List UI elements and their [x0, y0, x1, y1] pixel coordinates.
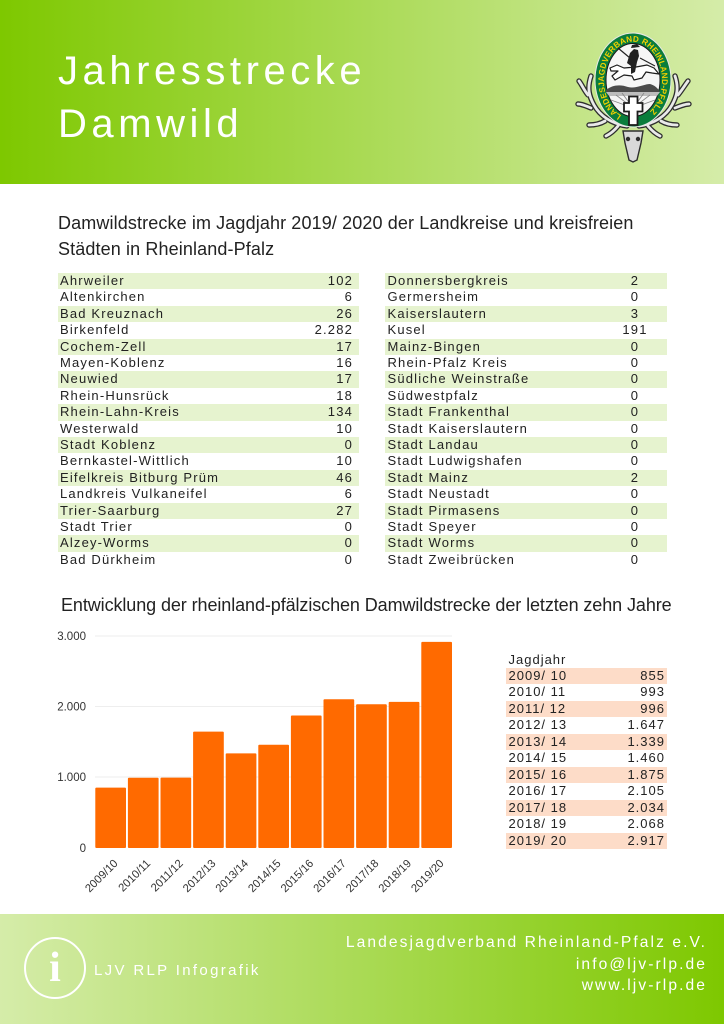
- x axis labels: 2017/18: [344, 858, 381, 895]
- table: districts left column: Bernkastel-Wittlich: [60, 453, 190, 468]
- sun rays: [611, 93, 655, 108]
- table: districts right column: 2: [631, 273, 639, 288]
- table: districts left column: 0: [345, 519, 353, 534]
- table: districts right column: 0: [631, 552, 639, 567]
- ring: [595, 33, 671, 127]
- table: districts left column: 10: [336, 453, 353, 468]
- table: yearly totals: 2.034: [627, 800, 665, 814]
- table: districts left column: Trier-Saarburg: [60, 503, 160, 518]
- table: districts left column: 46: [336, 470, 353, 485]
- table: districts left column: 27: [336, 503, 353, 518]
- header banner: [0, 0, 724, 184]
- x axis labels: 2012/13: [181, 858, 218, 895]
- antlers: [578, 76, 689, 136]
- table: districts right column: 0: [631, 289, 639, 304]
- table: districts right column: 0: [631, 404, 639, 419]
- table: yearly totals: 2015/ 16: [508, 766, 567, 782]
- heading: district table: Städten in Rheinland-Pfalz: [58, 239, 274, 259]
- table: yearly totals: [506, 652, 667, 849]
- table: yearly totals: 2010/ 11: [508, 684, 566, 699]
- table: districts right column: Rhein-Pfalz Kreis: [388, 355, 508, 370]
- logo: Landesjagdverband crest: LANDESJAGDVERBAND RHEINLAND-PFALZ: [598, 36, 668, 120]
- table: districts right column: [385, 273, 667, 567]
- x axis labels: 2009/10: [83, 858, 121, 895]
- x axis labels: [83, 858, 447, 895]
- x axis labels: 2016/17: [311, 858, 349, 895]
- table: districts right column: Stadt Kaiserslautern: [388, 421, 528, 436]
- table: districts right column: 0: [631, 535, 639, 550]
- y axis labels: 0: [80, 843, 86, 855]
- table: yearly totals: 993: [640, 684, 665, 699]
- table: districts right column: Kusel: [388, 322, 426, 337]
- table: yearly totals: 2.068: [627, 816, 665, 831]
- table: districts right column: 0: [631, 486, 639, 501]
- table: yearly totals: 1.875: [627, 766, 665, 782]
- table: districts left column: Mayen-Koblenz: [60, 355, 166, 370]
- hills: [606, 84, 660, 92]
- logo: Landesjagdverband crest: [575, 32, 692, 163]
- table: districts right column: 2: [631, 470, 639, 485]
- table: districts right column: 3: [631, 306, 639, 321]
- table: yearly totals: 2.917: [627, 832, 665, 848]
- cross: [624, 96, 642, 125]
- table: districts right column: Stadt Ludwigshafen: [388, 453, 523, 468]
- table: districts right column: Mainz-Bingen: [388, 339, 481, 354]
- table: districts right column: Germersheim: [388, 289, 479, 304]
- table: yearly totals: 2017/ 18: [508, 800, 567, 814]
- table: districts left column: Cochem-Zell: [60, 339, 147, 354]
- title: [58, 49, 366, 146]
- table: districts left column: [58, 273, 359, 567]
- x axis labels: 2013/14: [214, 858, 251, 895]
- table: districts left column: Birkenfeld: [60, 322, 130, 337]
- table: districts left column: 134: [328, 404, 353, 419]
- table: yearly totals: 2009/ 10: [508, 668, 567, 682]
- contact details: www.ljv-rlp.de: [582, 977, 707, 994]
- y axis labels: [57, 631, 86, 855]
- table: districts right column: Stadt Landau: [388, 437, 479, 452]
- heading: district table: [58, 213, 633, 259]
- x axis labels: 2011/12: [149, 858, 186, 894]
- icon: info circle: i: [49, 945, 61, 991]
- table: districts left column: Bad Kreuznach: [60, 306, 164, 321]
- table: yearly totals: 2014/ 15: [508, 750, 567, 765]
- table: districts right column: Südliche Weinstraße: [388, 371, 529, 386]
- table: districts right column: Stadt Neustadt: [388, 486, 490, 501]
- y axis labels: 3.000: [57, 631, 86, 643]
- table: districts right column: Stadt Frankenthal: [388, 404, 510, 419]
- bar chart: yearly totals: [57, 631, 452, 895]
- table: districts right column: 191: [622, 322, 648, 337]
- table: districts right column: 0: [631, 453, 639, 468]
- table: yearly totals: 2012/ 13: [508, 717, 567, 732]
- table: districts left column: Eifelkreis Bitburg Prüm: [60, 470, 219, 485]
- table: districts left column: 17: [336, 339, 353, 354]
- table: districts right column: Stadt Worms: [388, 535, 475, 550]
- y axis labels: 1.000: [57, 772, 86, 784]
- table: yearly totals: 1.647: [627, 717, 665, 732]
- heading: ten-year trend: Entwicklung der rheinland-pfälzischen Damwildstrecke der letzten zehn Jahre: [61, 595, 672, 615]
- table: yearly totals: 2013/ 14: [508, 734, 567, 748]
- bars: [95, 642, 452, 848]
- inner medallion: [606, 44, 660, 116]
- table: districts left column: Rhein-Lahn-Kreis: [60, 404, 180, 419]
- table: districts right column: Stadt Pirmasens: [388, 503, 500, 518]
- table: districts right column: 0: [631, 503, 639, 518]
- table: districts right column: 0: [631, 421, 639, 436]
- table: districts right column: 0: [631, 437, 639, 452]
- table: districts right column: 0: [631, 339, 639, 354]
- skull: [623, 131, 643, 162]
- table: yearly totals: 1.339: [627, 734, 665, 748]
- table: districts left column: 0: [345, 552, 353, 567]
- table: yearly totals: 996: [640, 700, 665, 716]
- table: districts left column: Ahrweiler: [60, 273, 125, 288]
- table: districts left column: 10: [336, 421, 353, 436]
- table: districts left column: Altenkirchen: [60, 289, 146, 304]
- table: districts left column: Alzey-Worms: [60, 535, 150, 550]
- table: districts right column: 0: [631, 388, 639, 403]
- table: districts right column: Donnersbergkreis: [388, 273, 509, 288]
- table: districts left column: Stadt Trier: [60, 519, 133, 534]
- title: Jahresstrecke: [58, 49, 366, 93]
- table: yearly totals: Jagdjahr: [508, 652, 566, 667]
- contact details: [346, 934, 707, 994]
- table: districts left column: Stadt Koblenz: [60, 437, 156, 452]
- table: districts left column: 16: [336, 355, 353, 370]
- table: districts right column: Stadt Speyer: [388, 519, 477, 534]
- table: yearly totals: 2018/ 19: [508, 816, 567, 831]
- table: districts left column: 17: [336, 371, 353, 386]
- table: yearly totals: 1.460: [627, 750, 665, 765]
- footer banner: [0, 914, 724, 1024]
- title: Damwild: [58, 102, 243, 146]
- y axis labels: 2.000: [57, 702, 86, 714]
- table: yearly totals: 2011/ 12: [508, 700, 566, 716]
- icon: info circle: [24, 937, 86, 999]
- table: districts left column: 102: [328, 273, 353, 288]
- table: districts left column: Neuwied: [60, 371, 119, 386]
- table: yearly totals: 2016/ 17: [508, 783, 567, 798]
- table: yearly totals: 855: [640, 668, 665, 682]
- table: districts right column: Stadt Mainz: [388, 470, 469, 485]
- table: districts right column: 0: [631, 519, 639, 534]
- x axis labels: 2015/16: [279, 858, 316, 895]
- table: districts left column: 18: [336, 388, 353, 403]
- x axis labels: 2014/15: [246, 858, 284, 895]
- contact details: Landesjagdverband Rheinland-Pfalz e.V.: [346, 934, 707, 951]
- footer label: LJV RLP Infografik: [94, 962, 261, 978]
- table: districts right column: Kaiserslautern: [388, 306, 487, 321]
- x axis labels: 2010/11: [116, 858, 153, 894]
- table: districts left column: Landkreis Vulkaneifel: [60, 486, 208, 501]
- table: districts left column: 0: [345, 437, 353, 452]
- table: districts left column: Bad Dürkheim: [60, 552, 156, 567]
- table: districts right column: Südwestpfalz: [388, 388, 479, 403]
- table: districts right column: 0: [631, 371, 639, 386]
- table: districts left column: 0: [345, 535, 353, 550]
- table: districts left column: 2.282: [315, 322, 353, 337]
- table: districts left column: Rhein-Hunsrück: [60, 388, 170, 403]
- rider: [610, 44, 659, 80]
- x axis labels: 2019/20: [409, 858, 447, 895]
- table: districts left column: 26: [336, 306, 353, 321]
- table: districts left column: Westerwald: [60, 421, 139, 436]
- x axis labels: 2018/19: [377, 858, 414, 895]
- contact details: info@ljv-rlp.de: [576, 956, 707, 972]
- table: districts right column: Stadt Zweibrücken: [388, 552, 515, 567]
- table: districts right column: 0: [631, 355, 639, 370]
- table: districts left column: 6: [345, 486, 353, 501]
- table: yearly totals: 2.105: [627, 783, 665, 798]
- table: yearly totals: 2019/ 20: [508, 832, 567, 848]
- heading: district table: Damwildstrecke im Jagdjahr 2019/ 2020 der Landkreise und kreisfreien: [58, 213, 633, 233]
- table: districts left column: 6: [345, 289, 353, 304]
